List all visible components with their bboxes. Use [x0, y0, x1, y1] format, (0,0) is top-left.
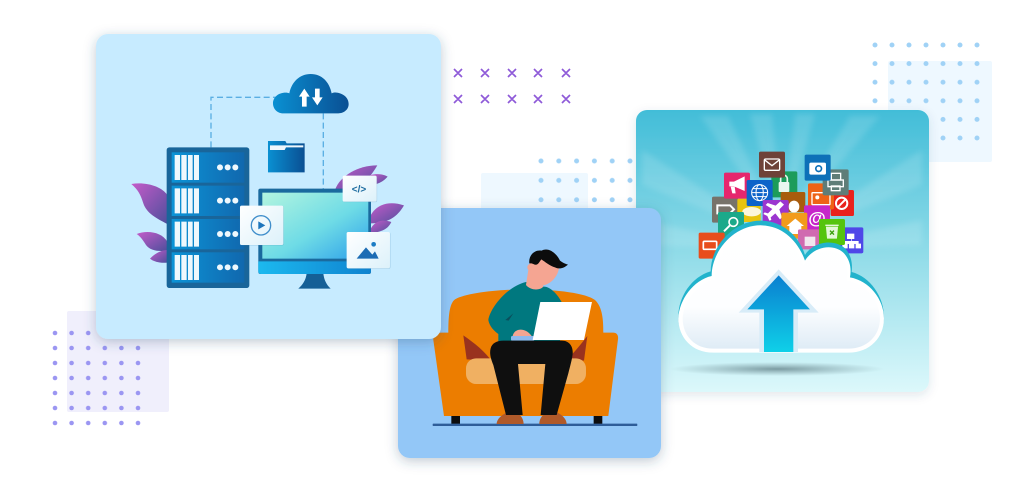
image card [347, 232, 390, 268]
illustration: server, monitor and cloud [131, 74, 404, 289]
dashed connectors [211, 97, 323, 189]
dot grid: top right [866, 36, 986, 147]
ground shadow [670, 362, 884, 376]
server rack [167, 147, 249, 288]
leaves right [335, 165, 404, 233]
icon: cloud with upload arrow [678, 221, 884, 353]
video card [240, 206, 283, 245]
panel: cloud upload apps [636, 110, 929, 392]
illustration: sofa and person [433, 249, 637, 426]
leaves left [131, 183, 167, 263]
cloud icon [273, 74, 349, 113]
app icons [699, 152, 863, 259]
monitor [258, 189, 371, 289]
dot grid: bottom left [47, 326, 146, 430]
light rays [642, 114, 922, 250]
cross marks [454, 69, 570, 103]
icon: upload arrow [739, 269, 819, 352]
code card: </> [352, 184, 366, 195]
folder icon [268, 141, 305, 172]
sofa [433, 289, 618, 425]
decorative square: top right [888, 61, 992, 162]
app icons: @ [808, 208, 826, 228]
decorative square: center [481, 173, 588, 213]
dot grid: center [532, 151, 639, 210]
floor line [433, 424, 637, 426]
panel: person on sofa [398, 208, 661, 458]
person [488, 249, 592, 424]
code card [343, 176, 377, 202]
decorative square: bottom left [67, 311, 169, 412]
panel: server and cloud [96, 34, 441, 339]
